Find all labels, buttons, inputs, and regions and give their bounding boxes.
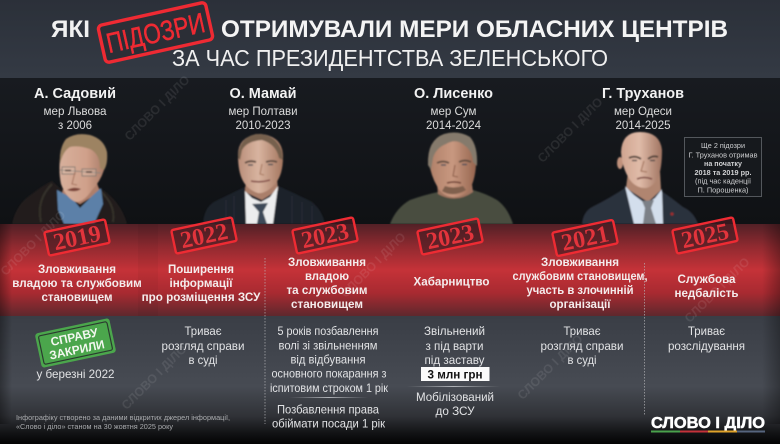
heading: Sadovyi: А. Садовий xyxy=(34,86,116,102)
watermarks: СЛОВО І ДІЛО xyxy=(535,95,606,166)
heading: Sadovyi: з 2006 xyxy=(58,120,92,132)
source note: Інфографіку створено за даними відкритих джерел інформації, xyxy=(16,413,230,422)
status: Trukhanov 2025: розслідування xyxy=(668,339,745,353)
status: Trukhanov 2021: в суді xyxy=(568,353,596,367)
dotted dividers xyxy=(264,258,266,424)
title line 1: ЯКІ xyxy=(51,17,90,43)
status: Mamay 2022: розгляд справи xyxy=(162,339,244,353)
charge: Trukhanov 2025 xyxy=(674,272,738,300)
stamp: 2023 Mamay: 2023 xyxy=(299,219,351,254)
title line 2: ЗА ЧАС ПРЕЗИДЕНТСТВА ЗЕЛЕНСЬКОГО xyxy=(172,45,608,71)
logo: СЛОВО І ДІЛО xyxy=(651,415,765,432)
column shading xyxy=(0,224,780,424)
charge: Mamay 2023 xyxy=(286,255,368,311)
status: Trukhanov 2025: Триває xyxy=(688,324,725,338)
charge: Mamay 2022: Поширення xyxy=(168,262,234,276)
watermarks: СЛОВО І ДІЛО xyxy=(122,73,193,144)
callout: Trukhanov's other suspicions: 2018 та 2019 рр. xyxy=(694,170,752,177)
status: Lysenko xyxy=(407,324,500,418)
stamp: case closed xyxy=(35,318,116,368)
status: Mamay 2022: в суді xyxy=(188,353,218,367)
source note xyxy=(16,413,230,431)
heading: Sadovyi: мер Львова xyxy=(44,106,107,118)
watermarks: СЛОВО І ДІЛО xyxy=(515,332,586,403)
callout: Trukhanov's other suspicions xyxy=(684,138,762,196)
watermarks: СЛОВО І ДІЛО xyxy=(338,230,409,301)
charge: Trukhanov 2025: недбалість xyxy=(674,286,738,300)
status: Mamay 2023 xyxy=(270,324,389,430)
charge: Mamay 2022: про розміщення ЗСУ xyxy=(142,290,261,304)
heading: Mamay xyxy=(228,86,298,132)
portrait: Mamay xyxy=(203,134,325,224)
charge: Mamay 2023: владою xyxy=(305,269,349,283)
heading: Mamay: 2010-2023 xyxy=(236,120,290,132)
portrait: Trukhanov xyxy=(582,132,698,224)
status: Mamay 2022 xyxy=(162,324,244,367)
charge: Mamay 2023: становищем xyxy=(291,297,363,311)
stamp: 2025: 2025 xyxy=(679,219,731,254)
stamp: case closed: ЗАКРИЛИ xyxy=(48,337,106,363)
status: Lysenko: з під варти xyxy=(426,339,484,353)
status band xyxy=(0,316,780,444)
charge: Sadovyi xyxy=(12,262,142,304)
portrait: Lysenko xyxy=(390,133,513,224)
status: Lysenko: Звільнений xyxy=(424,324,485,338)
heading: Mamay: мер Полтави xyxy=(228,106,298,118)
charge: Mamay 2023: та службовим xyxy=(286,283,368,297)
heading: Lysenko: 2014-2024 xyxy=(426,120,482,132)
stamp: ПІДОЗРИ: ПІДОЗРИ xyxy=(103,7,208,59)
charge: Trukhanov 2021: службовим становищем, xyxy=(512,269,648,283)
charge: Trukhanov 2021: Зловживання xyxy=(541,255,619,269)
charge: Sadovyi: Зловживання xyxy=(38,262,116,276)
status: Trukhanov 2021 xyxy=(540,324,624,367)
heading: Trukhanov: Г. Труханов xyxy=(602,86,684,102)
status: Lysenko: до ЗСУ xyxy=(436,404,475,418)
status: Mamay 2023: 5 років позбавлення xyxy=(278,324,378,338)
charge: Mamay 2022: інформації xyxy=(170,276,233,290)
heading: Mamay: О. Мамай xyxy=(230,86,296,102)
stamp: 2019: 2019 xyxy=(51,221,103,256)
heading: Sadovyi xyxy=(34,86,116,132)
status: Trukhanov 2021: Триває xyxy=(564,324,600,338)
portrait: Sadovyi xyxy=(12,134,127,224)
status: Mamay 2023: від відбування xyxy=(290,352,366,366)
dark portrait band xyxy=(0,78,780,224)
callout: Trukhanov's other suspicions: Г. Труханов отримав xyxy=(688,152,758,160)
heading: Lysenko xyxy=(414,86,493,132)
heading: Lysenko: О. Лисенко xyxy=(414,86,493,102)
status: Mamay 2023: Позбавлення права xyxy=(277,402,379,416)
heading: Trukhanov: мер Одеси xyxy=(614,106,672,118)
charge: Lysenko: Хабарництво xyxy=(414,274,490,288)
callout: Trukhanov's other suspicions: (під час каденції xyxy=(695,178,751,186)
callout: Trukhanov's other suspicions: Ще 2 підозри xyxy=(701,142,745,150)
charge: Sadovyi: становищем xyxy=(42,290,112,304)
charge: Trukhanov 2021 xyxy=(512,255,648,311)
heading: Trukhanov xyxy=(602,86,684,132)
source note: «Слово і діло» станом на 30 жовтня 2025 року xyxy=(16,422,173,431)
watermarks: СЛОВО І ДІЛО xyxy=(119,342,190,413)
header band xyxy=(0,0,780,78)
status: Mamay 2023: основного покарання з xyxy=(272,366,387,380)
stamp: 2023 Lysenko: 2023 xyxy=(424,220,476,255)
status: Trukhanov 2025 xyxy=(668,324,745,353)
status: Sadovyi: у березні 2022 xyxy=(36,367,115,381)
charge: Trukhanov 2025: Службова xyxy=(678,272,736,286)
charge: Sadovyi: владою та службовим xyxy=(12,276,142,290)
stamp: 2021: 2021 xyxy=(559,221,611,257)
status: Trukhanov 2021: розгляд справи xyxy=(540,339,624,353)
watermarks xyxy=(0,73,753,413)
status: Mamay 2023: волі зі звільненням xyxy=(278,338,378,352)
stamp: case closed: СПРАВУ xyxy=(49,325,100,349)
watermarks: СЛОВО І ДІЛО xyxy=(682,255,753,326)
charge: Mamay 2023: Зловживання xyxy=(288,255,366,269)
status: Lysenko: 3 млн грн xyxy=(428,368,482,382)
status: Lysenko: під заставу xyxy=(424,353,485,367)
stamp: 2022: 2022 xyxy=(178,219,230,254)
heading: Trukhanov: 2014-2025 xyxy=(616,120,670,132)
charge: Mamay 2022 xyxy=(142,262,261,304)
callout: Trukhanov's other suspicions: на початку xyxy=(704,161,742,168)
status: Mamay 2023: іспитовим строком 1 рік xyxy=(270,381,389,395)
status: Lysenko: Мобілізований xyxy=(416,390,494,404)
status: Mamay 2022: Триває xyxy=(184,324,222,338)
status: Mamay 2023: обіймати посади 1 рік xyxy=(272,416,386,430)
red charges band xyxy=(0,224,780,316)
charge: Trukhanov 2021: організації xyxy=(550,297,611,311)
title line 1: ОТРИМУВАЛИ МЕРИ ОБЛАСНИХ ЦЕНТРІВ xyxy=(221,17,728,43)
heading: Lysenko: мер Сум xyxy=(430,106,477,118)
charge: Trukhanov 2021: участь в злочинній xyxy=(526,283,634,297)
callout: Trukhanov's other suspicions: П. Порошенка) xyxy=(698,188,748,194)
